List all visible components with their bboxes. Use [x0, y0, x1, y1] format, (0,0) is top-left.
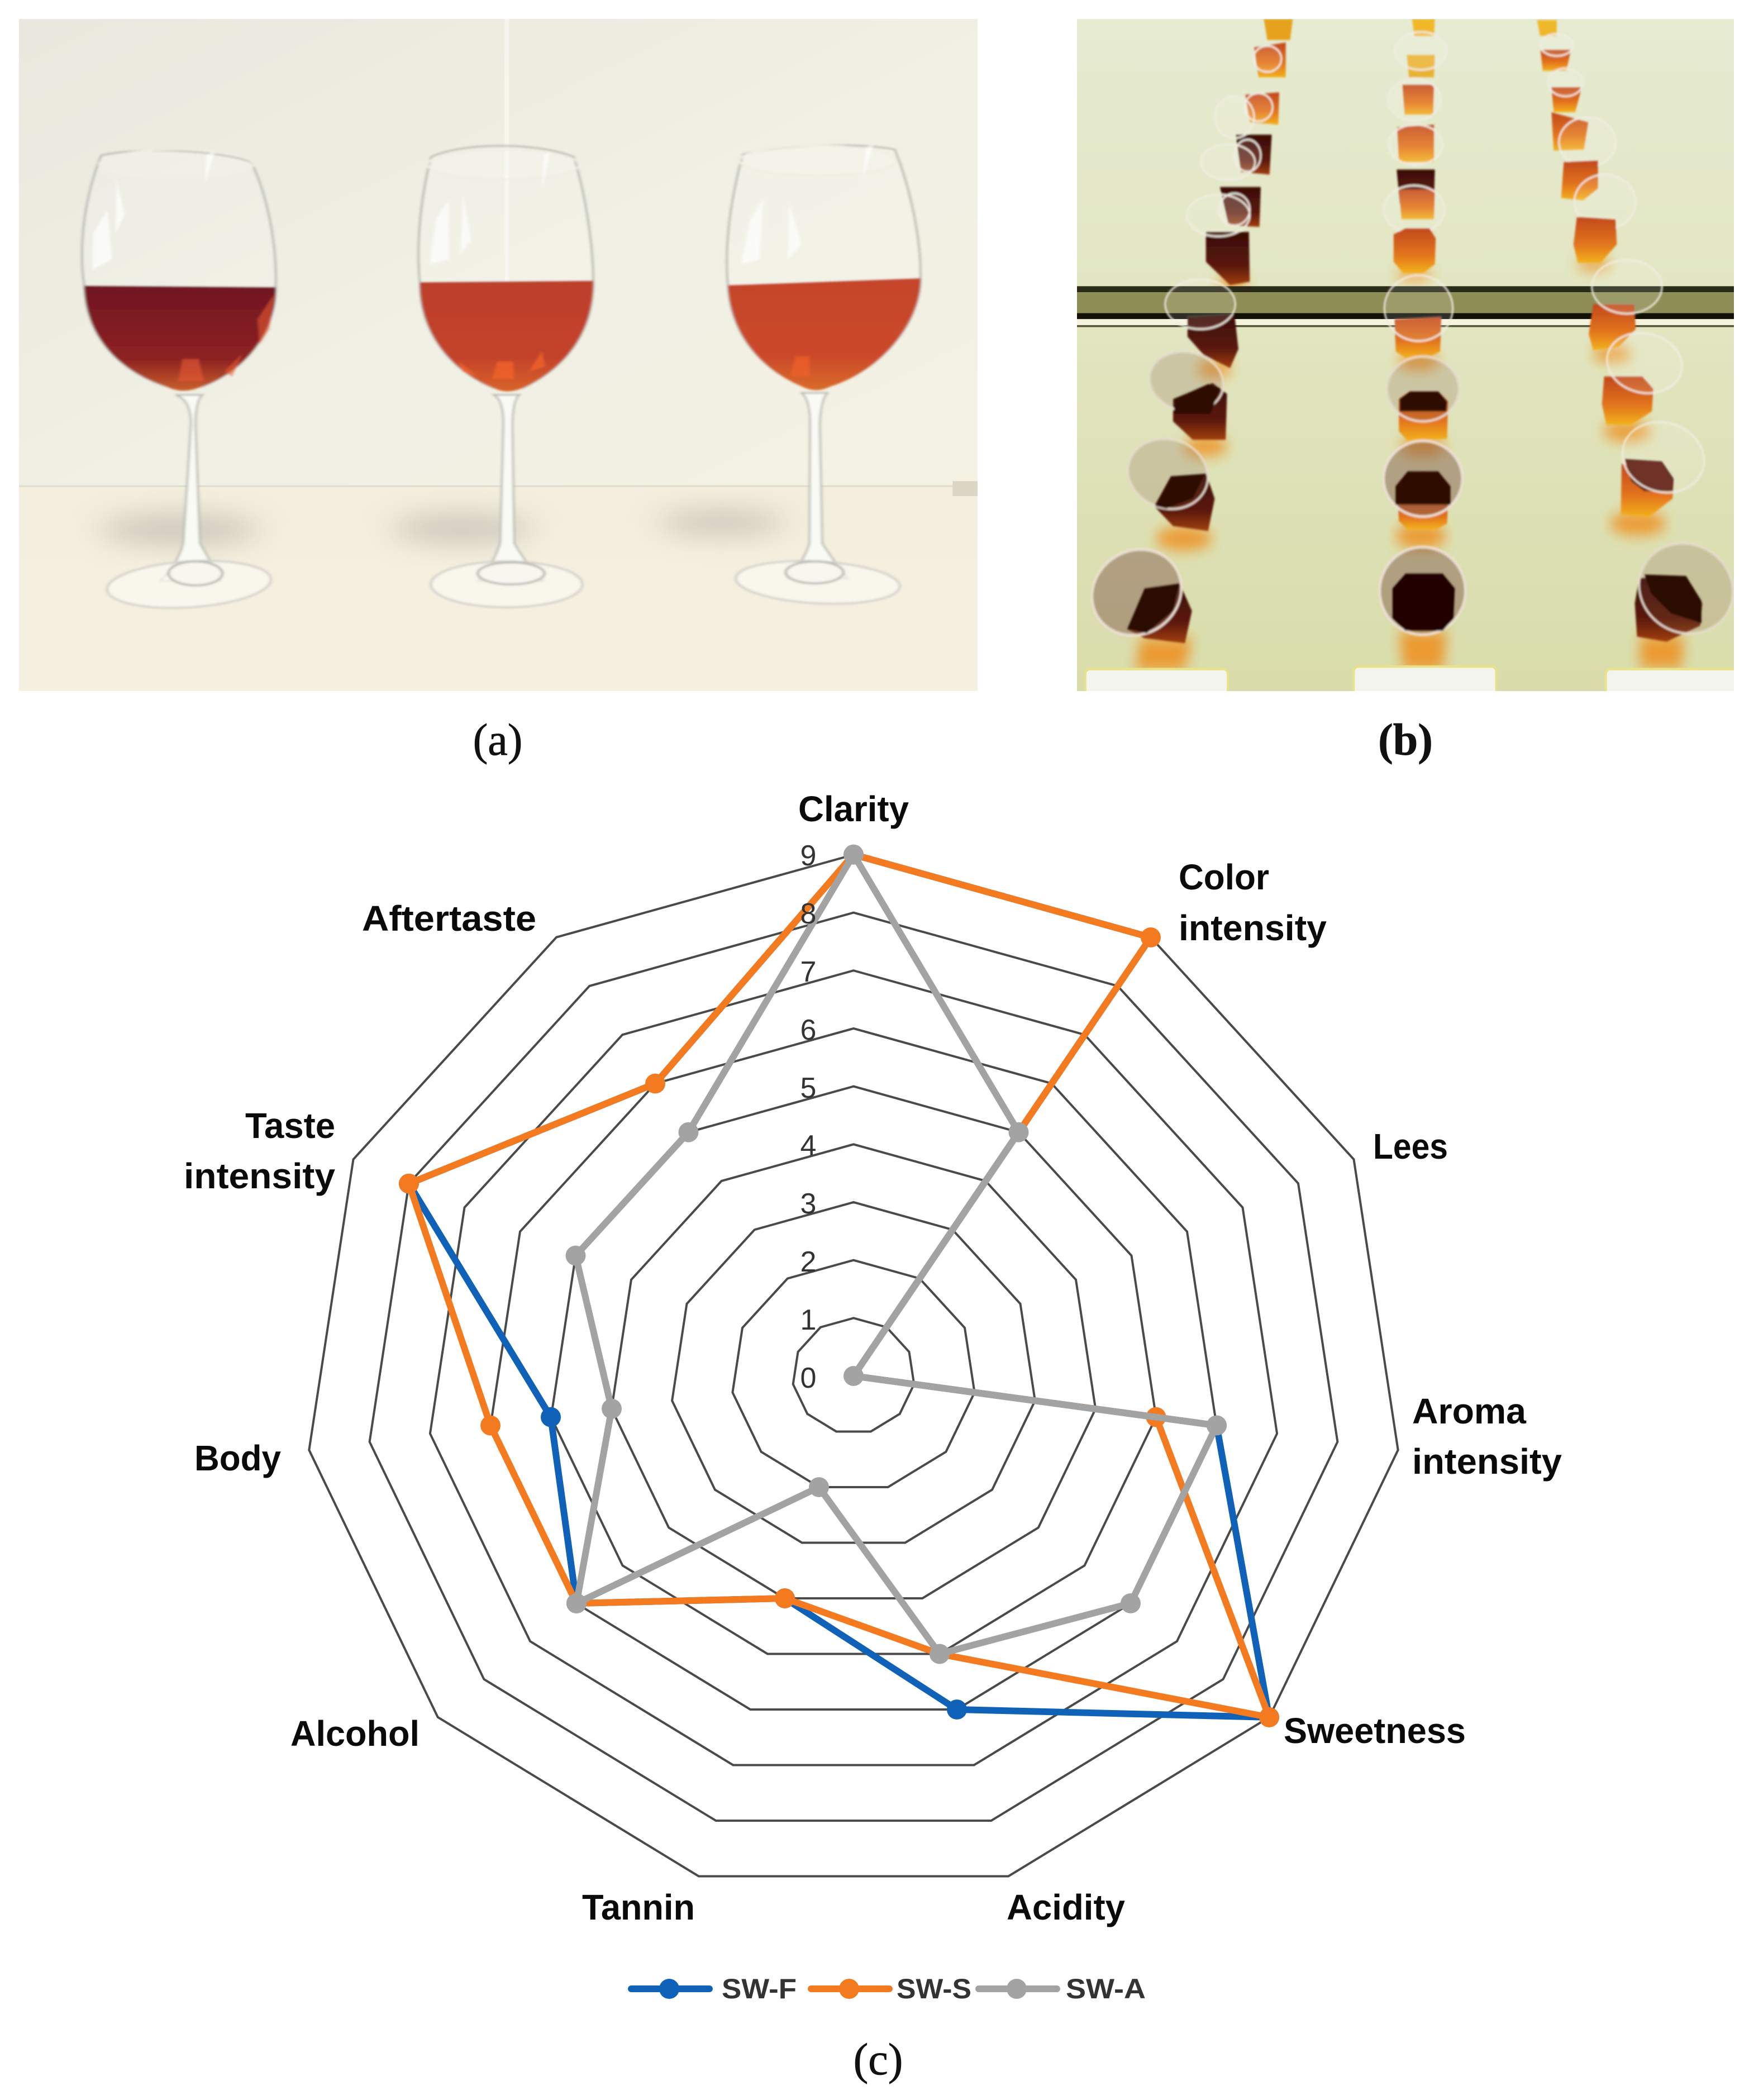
legend entry: SW-S: SW-S: [897, 1973, 971, 2004]
radar grid rings 1 to 9: [309, 855, 1398, 1876]
radial axis numbers 0 to 9: 9: [800, 840, 816, 872]
axis label: Color intensity: [1179, 857, 1327, 948]
legend entry: SW-S: [811, 1973, 971, 2004]
axis label: Alcohol: Alcohol: [290, 1713, 420, 1754]
legend entry: SW-F: SW-F: [722, 1973, 797, 2004]
axis label: Taste intensity: intensity: [184, 1156, 335, 1196]
radar chart (c): [184, 789, 1562, 2004]
radial axis numbers 0 to 9: 7: [800, 956, 816, 988]
photo (b): rows of tasting cups: [1077, 19, 1734, 691]
series SW-S (orange): [399, 845, 1279, 1727]
legend: [631, 1973, 1146, 2004]
axis label: Aroma intensity: intensity: [1412, 1441, 1562, 1482]
axis label: Aftertaste: Aftertaste: [362, 898, 536, 939]
middle column of cups: [1380, 19, 1466, 635]
table shadows: [99, 508, 786, 546]
glass 3: medium wine, tilted surface: [727, 145, 921, 608]
right column of cups: [1537, 20, 1741, 644]
axis label: Taste intensity: Taste: [245, 1106, 335, 1146]
radial axis numbers 0 to 9: 8: [800, 898, 816, 930]
radial axis numbers 0 to 9: 2: [800, 1246, 816, 1278]
radial axis numbers 0 to 9: 0: [800, 1362, 816, 1394]
axis label: Taste intensity: [184, 1106, 335, 1196]
radial axis numbers 0 to 9: 6: [800, 1014, 816, 1046]
caption (c): (c): [854, 2035, 903, 2084]
axis label: Body: Body: [194, 1438, 281, 1478]
axis label: Acidity: Acidity: [1007, 1887, 1125, 1927]
axis label: Tannin: Tannin: [582, 1887, 695, 1927]
axis label: Color intensity: Color: [1179, 857, 1269, 897]
series SW-A (grey): [565, 845, 1227, 1664]
radial axis numbers 0 to 9: 5: [800, 1072, 816, 1104]
left column of cups: [1083, 19, 1293, 646]
caption (b): (b): [1378, 716, 1433, 765]
axis label: Sweetness: Sweetness: [1284, 1711, 1466, 1751]
photo (a): three wine glasses: [19, 19, 978, 691]
rail across table: [1077, 286, 1734, 327]
axis label: Color intensity: intensity: [1179, 908, 1327, 948]
caption (a): (a): [473, 716, 522, 765]
legend entry: SW-A: SW-A: [1066, 1973, 1146, 2004]
axis label: Lees: Lees: [1373, 1126, 1448, 1166]
axis label: Clarity: Clarity: [798, 789, 909, 829]
axis label: Aroma intensity: Aroma: [1412, 1391, 1526, 1431]
amber glow under cups: [1136, 258, 1684, 670]
radial axis numbers 0 to 9: 4: [800, 1130, 816, 1162]
glass 1: darkest wine: [82, 150, 276, 613]
legend entry: SW-A: [979, 1973, 1146, 2004]
radial axis numbers 0 to 9: [800, 840, 816, 1394]
radial axis numbers 0 to 9: 1: [800, 1304, 816, 1336]
glass 2: medium wine: [418, 146, 593, 607]
series SW-F (blue): [399, 855, 1279, 1727]
radial axis numbers 0 to 9: 3: [800, 1188, 816, 1220]
legend entry: SW-F: [631, 1973, 797, 2004]
axis label: Aroma intensity: [1412, 1391, 1562, 1482]
white labels: [1085, 666, 1742, 702]
